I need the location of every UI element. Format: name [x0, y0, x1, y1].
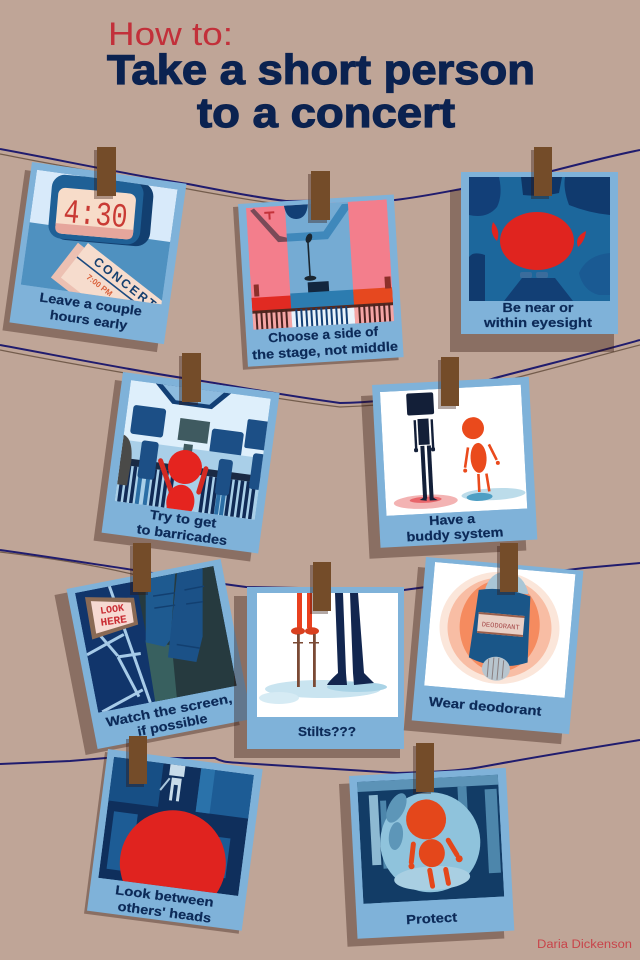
caption: Stilts???: [298, 724, 356, 739]
caption: Wear deodorant: [428, 694, 543, 719]
caption: if possible: [136, 711, 209, 739]
caption: hours early: [49, 307, 129, 333]
clothespin 8: [497, 543, 518, 595]
caption: others' heads: [117, 899, 212, 926]
caption: Protect: [406, 910, 458, 927]
card: look between others' heads: [84, 749, 263, 934]
caption: Have a: [429, 511, 476, 528]
card: wear deodorant: [404, 557, 583, 744]
caption: [37, 289, 143, 335]
caption: [405, 509, 504, 544]
string 1: [0, 149, 640, 206]
clothespin 6: [130, 543, 151, 595]
title: Take a short person: [107, 46, 535, 93]
caption: the stage, not middle: [252, 339, 398, 362]
clothespin 5: [438, 357, 459, 409]
caption: Look between: [114, 882, 215, 910]
title: to a concert: [197, 89, 455, 136]
caption: Choose a side of: [268, 324, 379, 345]
photo: alarm clock and tickets: 4:30: [62, 195, 129, 238]
clothespin 4: [179, 353, 201, 405]
photo: deodorant: [424, 562, 575, 698]
clothespin 9: [126, 736, 147, 787]
card: watch the screen: [54, 559, 252, 755]
photo: truss and screen sign: HERE: [100, 614, 128, 630]
string 2: [0, 340, 640, 407]
card: have a buddy system: [361, 377, 537, 559]
caption: Try to get: [149, 507, 218, 531]
photo: view between heads: [98, 756, 254, 896]
photo: two figures: [380, 385, 527, 516]
clothespin 7: [310, 562, 331, 614]
clothespin 2: [308, 171, 330, 223]
photo: truss and screen sign: LOOK: [100, 604, 125, 618]
photo: figure in protective bubble: [357, 775, 504, 904]
card: protect: [339, 768, 514, 947]
caption: [105, 691, 236, 744]
card: be near or within eyesight: [450, 172, 618, 352]
clothespin 3: [531, 147, 552, 199]
photo: stage: [246, 199, 394, 330]
string 3: [0, 550, 640, 590]
card: try to get to barricades: [94, 372, 280, 561]
title: [107, 16, 535, 136]
card: leave a couple hours early: [2, 162, 192, 354]
clothespin 1: [94, 147, 116, 199]
credit: Daria Dickenson: [537, 939, 632, 951]
photo: truss and screen sign: [75, 566, 237, 713]
caption: to barricades: [136, 521, 228, 548]
card: stilts: [234, 587, 404, 758]
caption: [251, 323, 398, 362]
title: How to:: [108, 16, 233, 52]
clothespin 10: [413, 743, 434, 794]
photo: stilts and legs: [257, 593, 398, 717]
caption: Be near or: [502, 300, 574, 315]
photo: red head in crowd: [469, 177, 610, 301]
caption: Watch the screen,: [105, 691, 233, 730]
photo: alarm clock and tickets: [21, 170, 178, 304]
photo: deodorant: DEODORANT: [481, 621, 520, 633]
photo: barricade view: [114, 380, 273, 529]
card: choose a side of the stage: [233, 194, 404, 370]
caption: Leave a couple: [39, 289, 143, 319]
caption: buddy system: [406, 524, 504, 544]
photo: alarm clock and tickets: CONCERT: [91, 254, 159, 312]
string 4: [0, 740, 640, 773]
caption: [483, 300, 593, 330]
caption: [136, 505, 230, 548]
caption: within eyesight: [483, 315, 593, 330]
photo: alarm clock and tickets: 7:00 PM: [85, 273, 114, 299]
caption: [112, 882, 215, 926]
